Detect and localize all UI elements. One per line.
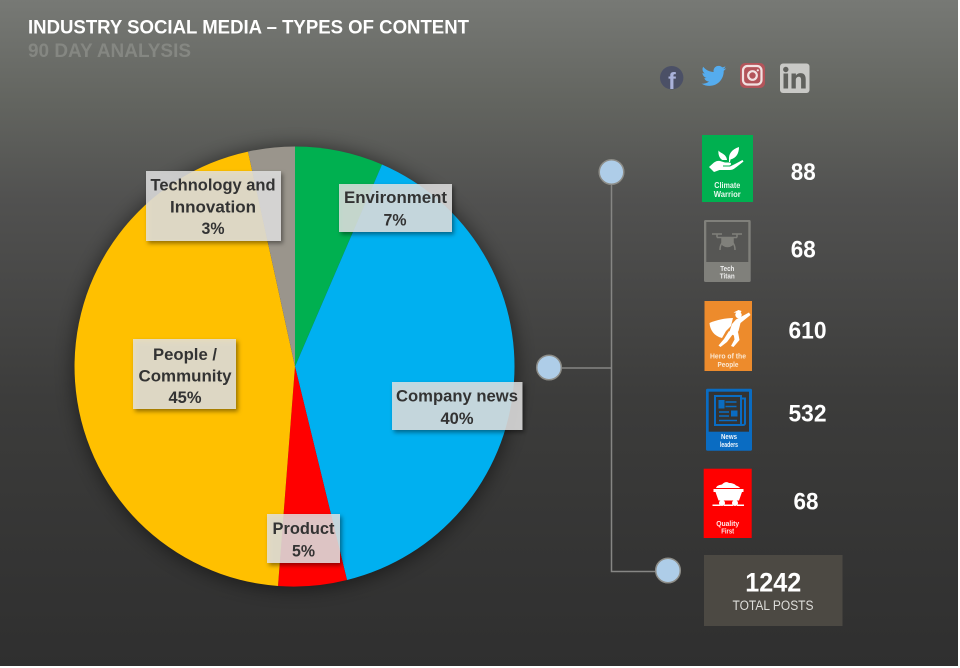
icon: drone	[712, 234, 742, 250]
badge: quality first	[704, 469, 752, 538]
label: people / community: 45%	[168, 388, 202, 407]
label: environment: Environment	[344, 188, 447, 207]
badge: news leaders	[706, 389, 752, 451]
count: climate warrior: 88	[791, 159, 816, 186]
icon: facebook	[660, 66, 683, 94]
total posts box: 1242	[745, 568, 801, 598]
icon: linkedin	[780, 64, 810, 93]
badge: hero of the people	[704, 301, 752, 371]
icon: superhero	[710, 310, 750, 347]
title: INDUSTRY SOCIAL MEDIA – TYPES OF CONTENT	[28, 18, 469, 38]
label: company news: 40%	[440, 409, 474, 428]
label: technology and innovation: Innovation	[170, 198, 256, 216]
badge: hero of the people: People	[718, 360, 738, 369]
connector lines	[549, 172, 668, 572]
slice: technology and innovation	[248, 146, 295, 366]
badge: news leaders: News	[721, 434, 737, 441]
count: hero of the people: 610	[788, 318, 826, 344]
label: environment	[339, 184, 452, 232]
icon: newspaper	[715, 396, 745, 425]
badge: tech titan	[704, 220, 751, 282]
label: company news: Company news	[396, 386, 518, 406]
icon: twitter	[702, 66, 726, 86]
label: technology and innovation: Technology and	[150, 176, 276, 194]
badge: tech titan: Titan	[720, 274, 735, 280]
connector node: bottom	[656, 558, 680, 583]
badge: hero of the people: Hero of the	[710, 352, 746, 360]
label: people / community: Community	[138, 366, 232, 386]
count: news leaders: 532	[788, 400, 826, 428]
label: company news	[392, 382, 522, 430]
subtitle: 90 DAY ANALYSIS	[28, 41, 191, 62]
icon: instagram	[740, 63, 765, 88]
badge: climate warrior: Warrior	[714, 190, 741, 199]
connector node: top	[599, 160, 624, 184]
slice: company news	[295, 164, 515, 580]
count: quality first: 68	[794, 488, 818, 516]
icon: mine cart	[712, 482, 744, 506]
label: product: 5%	[292, 542, 315, 560]
badge: news leaders: leaders	[720, 442, 738, 449]
pie chart	[73, 146, 517, 590]
badge: quality first: First	[721, 527, 735, 536]
social media icons	[660, 63, 810, 94]
label: product	[267, 514, 340, 563]
badge: climate warrior: Climate	[714, 181, 741, 190]
badge: tech titan: Tech	[720, 266, 734, 273]
total posts box	[704, 555, 842, 626]
badge: climate warrior	[702, 135, 753, 202]
slice: environment	[295, 146, 382, 366]
label: people / community	[133, 339, 236, 409]
slice: people / community	[75, 152, 295, 586]
total posts box: TOTAL POSTS	[732, 598, 814, 613]
icon: hand with plant	[709, 147, 744, 172]
label: environment: 7%	[384, 210, 406, 230]
badge: quality first: Quality	[716, 519, 740, 528]
connector node: middle	[537, 355, 561, 380]
icon: facebook: f	[668, 68, 676, 94]
label: technology and innovation: 3%	[202, 219, 224, 238]
label: people / community: People /	[153, 345, 217, 364]
label: technology and innovation	[146, 171, 281, 241]
label: product: Product	[272, 519, 335, 538]
slice: product	[278, 366, 347, 587]
count: tech titan: 68	[791, 236, 816, 264]
